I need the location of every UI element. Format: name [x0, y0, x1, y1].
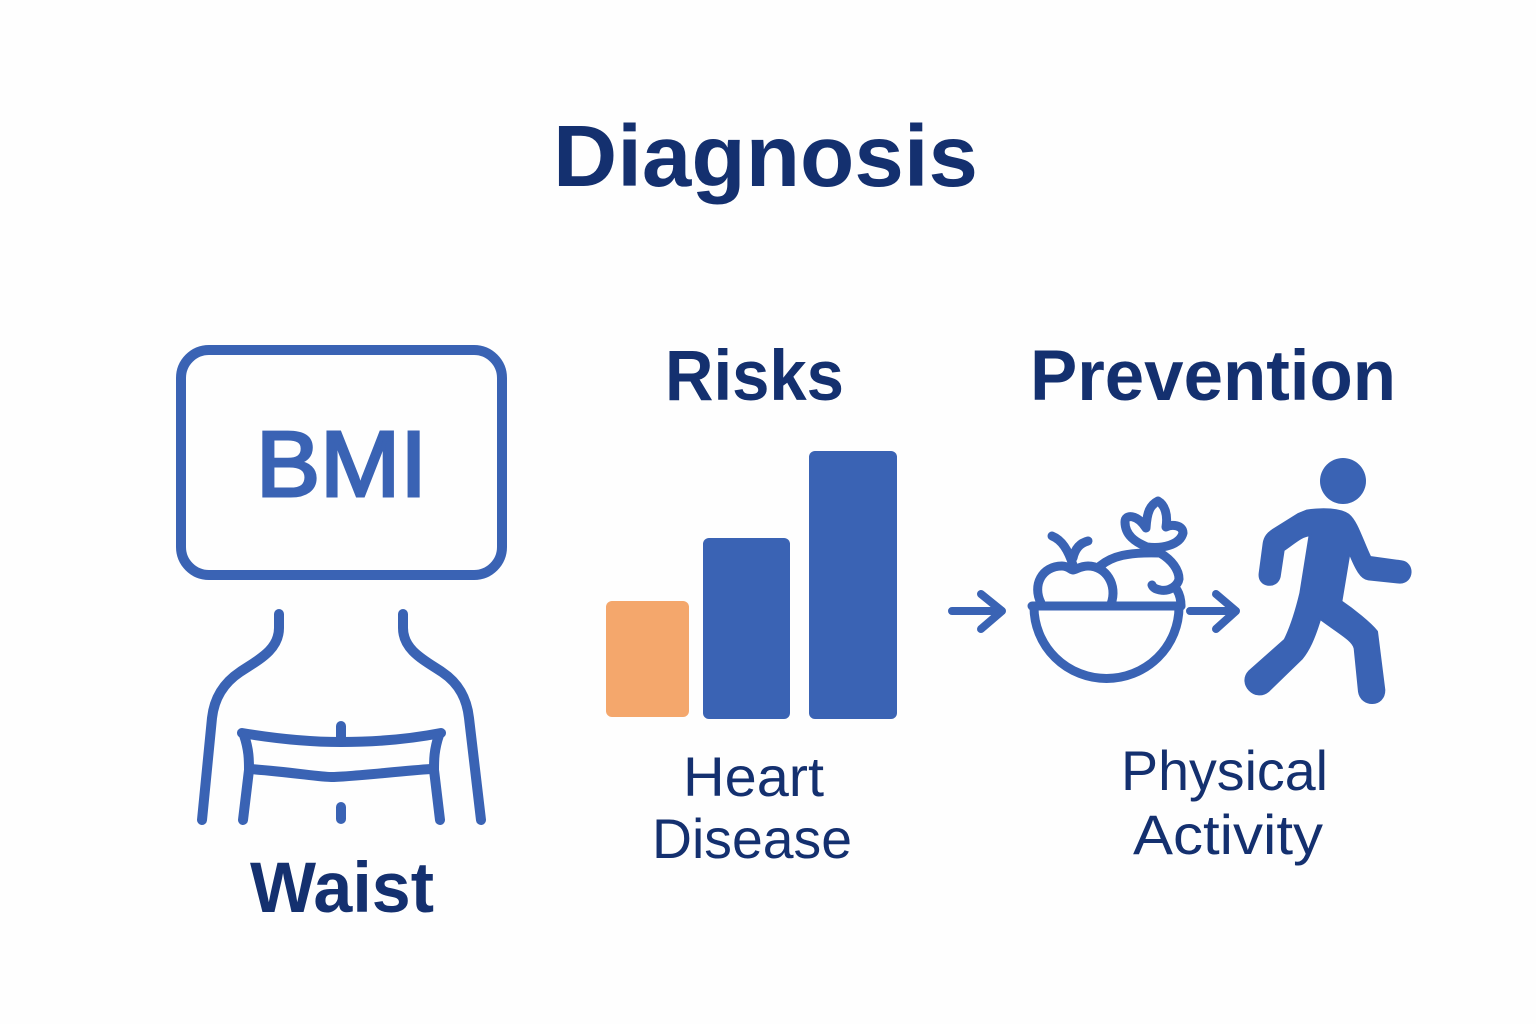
label: Heart Disease: Disease [652, 807, 852, 870]
icon: walking person [1246, 458, 1410, 703]
icon: BMI box [181, 350, 502, 575]
icon: BMI box: BMI [256, 412, 427, 516]
bar chart [606, 451, 897, 719]
panel: risks [606, 337, 897, 870]
label: Physical Activity: Activity [1133, 803, 1323, 866]
heading: Risks: Risks [665, 337, 844, 416]
icon: torso with waist band [202, 614, 481, 820]
arrow: into food bowl [952, 594, 1002, 629]
icon: food bowl [1032, 501, 1183, 678]
label: Waist: Waist [250, 849, 434, 928]
panel: prevention [952, 337, 1410, 866]
panel: BMI and waist [181, 350, 502, 928]
label: Heart Disease: Heart [683, 745, 824, 808]
label: Heart Disease [652, 745, 852, 870]
label: Physical Activity: Physical [1121, 739, 1328, 802]
arrow: to walking figure [1190, 594, 1236, 629]
label: Physical Activity [1121, 739, 1328, 866]
title: Diagnosis [553, 108, 978, 205]
heading: Prevention: Prevention [1030, 337, 1396, 416]
